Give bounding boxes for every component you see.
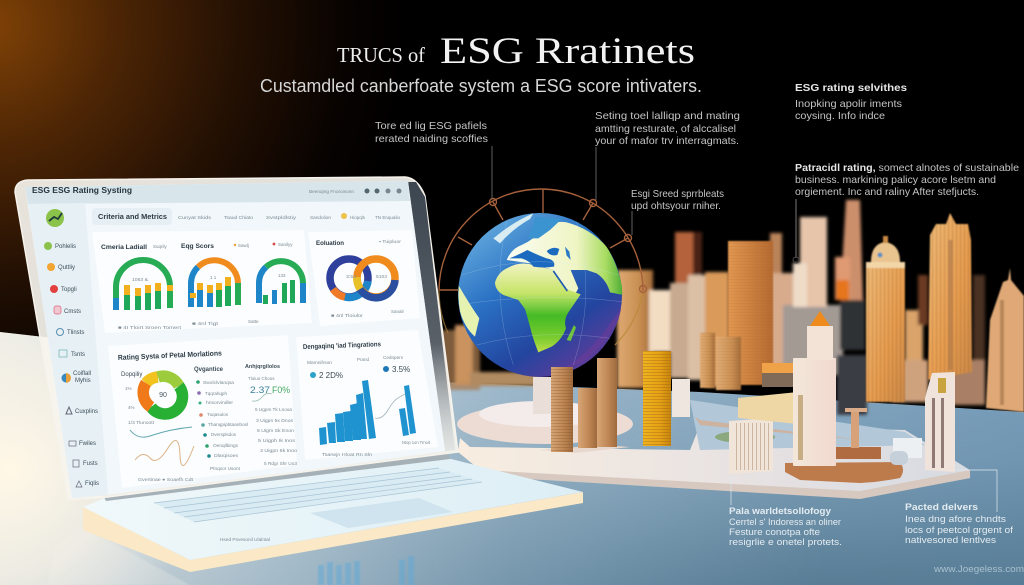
callout: bottom left world ecology: Festure conotpa ofte [729,527,820,538]
legend list: Oenqilbings [213,443,239,448]
donut chart [143,376,182,414]
metrics column: Tloiuo Choos [248,376,275,381]
panel: engagement and integrations bar chart: Cednpers [383,355,404,360]
metrics column [210,364,298,471]
metrics column: 3 Uigpn 5x Dnos [256,418,294,423]
panel: rating systems [108,335,298,488]
main white tower [793,358,836,466]
panel: engagement and integrations bar chart: Prand [357,357,370,362]
app title: ESG ESG Rating Systing [32,185,132,195]
legend list: hnsorvindler [206,400,234,405]
legend list: Swolclvlanqsa [203,380,235,385]
ring right [357,259,395,298]
panel: criteria gauges: Sawlj [238,243,249,248]
blue bars [319,380,416,445]
sidebar navigation: Cmsts [64,309,81,315]
laptop screen frame [15,177,458,500]
title [337,31,695,72]
callout: top-left ESG profiles: Tore ed lig ESG pafiels [375,120,487,132]
legend list: Dlarqisoes [214,453,239,458]
ring left [330,259,368,297]
legend list: Dversplsdos [211,432,237,437]
plaza base [785,462,903,483]
panel: engagement and integrations bar chart: Ntop 1on Trnoit [402,440,431,445]
wooden bar columns [540,358,630,453]
metrics column: Anhjqrgilolos [245,364,280,370]
callout: setting tool ratings [595,110,740,200]
panel: criteria gauges: Eqg Scors [181,243,214,250]
mid orange-roof complex [738,392,798,424]
panel: criteria gauges: Suqrily [153,244,168,249]
legend list: Thanqpipbtaanbosl [208,422,248,427]
callout: top-left ESG profiles: rerated naiding scoffies [375,133,488,145]
metrics column: 5 Ugpm Tk Lnooa [255,407,292,412]
metrics column: 5 Rdgr Shr Uo3 [264,461,298,466]
metrics column: Ptnqxor Usont [210,466,241,471]
small white boxes [893,438,922,458]
callout: setting tool ratings: Seting toel lalliqp and mating [595,110,740,122]
sidebar [28,203,108,498]
panel: rating systems: 1% [125,386,132,391]
panel: criteria gauges: ■ 4nl Tigt [192,321,219,326]
website url: www.Joegeless.com [933,564,1024,574]
sidebar navigation: Myhis [75,378,91,384]
panel: rating systems: 90 [159,392,167,399]
gauge legend: ■ 4I Tloirt Sroen Tomert [118,325,182,330]
callout: patriarchal rating paragraph: Patracidl rating, somect alnotes of sustainable [795,162,1019,174]
metrics column: 3 Uigpn 6k Inoo [260,448,298,453]
globe stand and platform [457,377,970,499]
callout: bottom left world ecology: Pala warldetsollofogy [729,506,832,517]
trackpad [310,498,453,528]
callout: ESG speed specialists: Esgi Sreed sprrbleats [631,188,724,200]
callout: setting tool ratings: your of mafor trv interragmats. [595,135,739,147]
miniature foreground city model [715,311,955,483]
panel: engagement and integrations bar chart: Dengaqinq 'iad Tingrations [303,341,381,351]
sidebar navigation: Fwiles [79,441,96,447]
gauge three [259,261,303,303]
callout: bottom right packed delivers [905,470,1013,546]
callout: ESG speed specialists: upd ohtsyour rniher. [631,200,721,212]
tab bar [92,208,400,225]
trend line [375,394,405,418]
callout: ESG rating solutions: ESG rating selvithes [795,82,907,94]
panel: criteria gauges: Sanilyy [278,242,293,247]
green park [715,431,775,443]
callout: bottom right packed delivers: Inea dng afore chndts [905,514,1006,525]
title: ESG Rratinets [440,31,695,72]
teal wave [130,427,192,437]
panel: evaluation rings: ▪ Tuipluor [379,239,402,244]
sidebar navigation: Tsnts [71,352,85,358]
orbit ring [439,189,646,345]
panel: evaluation rings: 5103 [376,274,388,279]
continents [458,213,623,370]
metrics column: 5 Uigm Sk Enon [257,428,295,433]
tab bar: Tsaud Chiato [224,215,254,220]
panel: criteria gauges: Satte [248,319,259,324]
callout: ESG rating solutions: coysing. Info indce [795,110,885,122]
callout: ESG rating solutions [795,82,907,122]
window controls: Beenqing Fnoroisonn [309,189,355,194]
sidebar navigation: Topgli [61,287,77,293]
callout: bottom right packed delivers: locs of peetcol grgent of [905,525,1013,536]
background: blue table surface [0,332,1024,585]
laptop reflection on table [48,528,414,585]
panel: engagement and integrations bar chart: 2 2D% [319,371,343,380]
midground golden dome tower [866,236,905,402]
panel: criteria gauges: Cmeria Ladiall [101,244,147,251]
panel: rating systems: 4% [128,405,135,410]
golden bar column [643,351,690,446]
metrics column: F0% [272,385,290,395]
callout: ESG rating solutions: Inopking apolir iments [795,98,902,110]
panel: evaluation rings [308,230,420,326]
callout: patriarchal rating paragraph: orgiement. Inc and raliny After stefjucts. [795,186,979,198]
sidebar navigation: Fiqlis [85,481,99,487]
panel: rating systems: 1/3 Tlunoott [128,420,155,425]
sidebar navigation: Pohlelis [55,244,76,250]
keyboard [154,468,482,522]
palm rest small text: Hsed Psvesonil Ulalntal [220,537,270,542]
panel: evaluation rings: Eoluation [316,240,344,247]
panel: engagement and integrations bar chart [296,330,438,460]
laptop base and keyboard [83,453,583,572]
window controls [309,188,402,194]
laptop [15,177,583,572]
panel: evaluation rings: 3:53 [346,274,357,279]
callout: setting tool ratings: amtting resturate, of alccalisel [595,123,736,135]
tab bar: Cunyat Skids [178,215,212,220]
callout: top-left ESG profiles [375,120,492,199]
tab bar: Criteria and Metrics [98,212,167,221]
sidebar navigation: Cuxplins [75,409,98,415]
sidebar navigation: Fusts [83,461,98,467]
panel: engagement and integrations bar chart: Mamnihson [307,360,333,365]
left apartment block [729,418,773,474]
callout: patriarchal rating paragraph: business. markining palicy acore lsetm and [795,174,996,186]
legend list [194,367,248,458]
panel: evaluation rings: ■ 4nl Tloiulor [331,313,364,318]
tab bar: Svstpldlstiy [266,215,297,220]
legend list: Qvgantice [194,367,224,373]
T-shaped column [851,410,859,448]
panel: evaluation rings: Sanalr [391,309,405,314]
title: TRUCS of [337,43,425,67]
earth sphere [458,213,622,377]
gauge one [116,260,170,310]
metrics column: 2.37 [250,385,270,395]
midground orange tower block [700,241,773,390]
screen surface [25,181,445,498]
legend list: Tqqrahqph [205,391,227,396]
callout: bottom right packed delivers: Pacted delvers [905,502,978,513]
panel: rating systems: Dopqiliy [121,372,142,378]
orange wave [135,440,194,466]
panel: criteria gauges: 1053 & [132,277,148,282]
callout: bottom right packed delivers: nativesored lentlves [905,535,996,546]
sidebar navigation: Quttliy [58,265,75,271]
app logo [46,209,64,227]
flame on tower [810,311,830,326]
panel: engagement and integrations bar chart: Tsarwjn Hloat Rn Sln [322,452,373,457]
callout: patriarchal rating paragraph [793,162,1019,263]
panel: criteria gauges: 133 [278,273,286,278]
callout: ESG speed specialists [631,188,724,235]
callout: bottom left world ecology: resigrlie e onetel protets. [729,537,842,548]
globe with orbit ring [439,189,646,377]
callout: bottom left world ecology: Cerrtel s' Indoress an oliner [729,517,841,528]
tab bar: Sandolion [310,215,332,220]
callout: bottom left world ecology [729,475,842,548]
panel: rating systems: Rating Systa of Petal Morlations [118,348,222,362]
sidebar navigation: Tlinsts [67,330,84,336]
panel: criteria gauges [92,230,312,333]
panel: rating systems: Gvertinae ● Soaefh Cdt [138,477,194,482]
tab bar: TN Enqualio [375,215,400,220]
panel: engagement and integrations bar chart: 3.5% [392,365,410,374]
metrics column: 5 Uigph Ik Inos [258,438,296,443]
panel: criteria gauges: 1 1 [210,275,217,280]
gauge two [191,260,238,307]
subtitle: Custamdled canberfoate system a ESG score intivaters. [260,75,702,96]
title bar [25,181,410,204]
midground right-edge spire tower [986,268,1024,412]
sidebar navigation [44,242,99,487]
dark right bezel [408,182,455,451]
tab bar: Hiopqls [350,215,366,220]
midground tan skyscraper [928,213,972,380]
sidebar navigation: Coiflall [73,371,91,377]
right white tower [925,372,955,472]
legend list: Tuqasulos [207,412,229,417]
blurred background city skyline [440,200,985,415]
